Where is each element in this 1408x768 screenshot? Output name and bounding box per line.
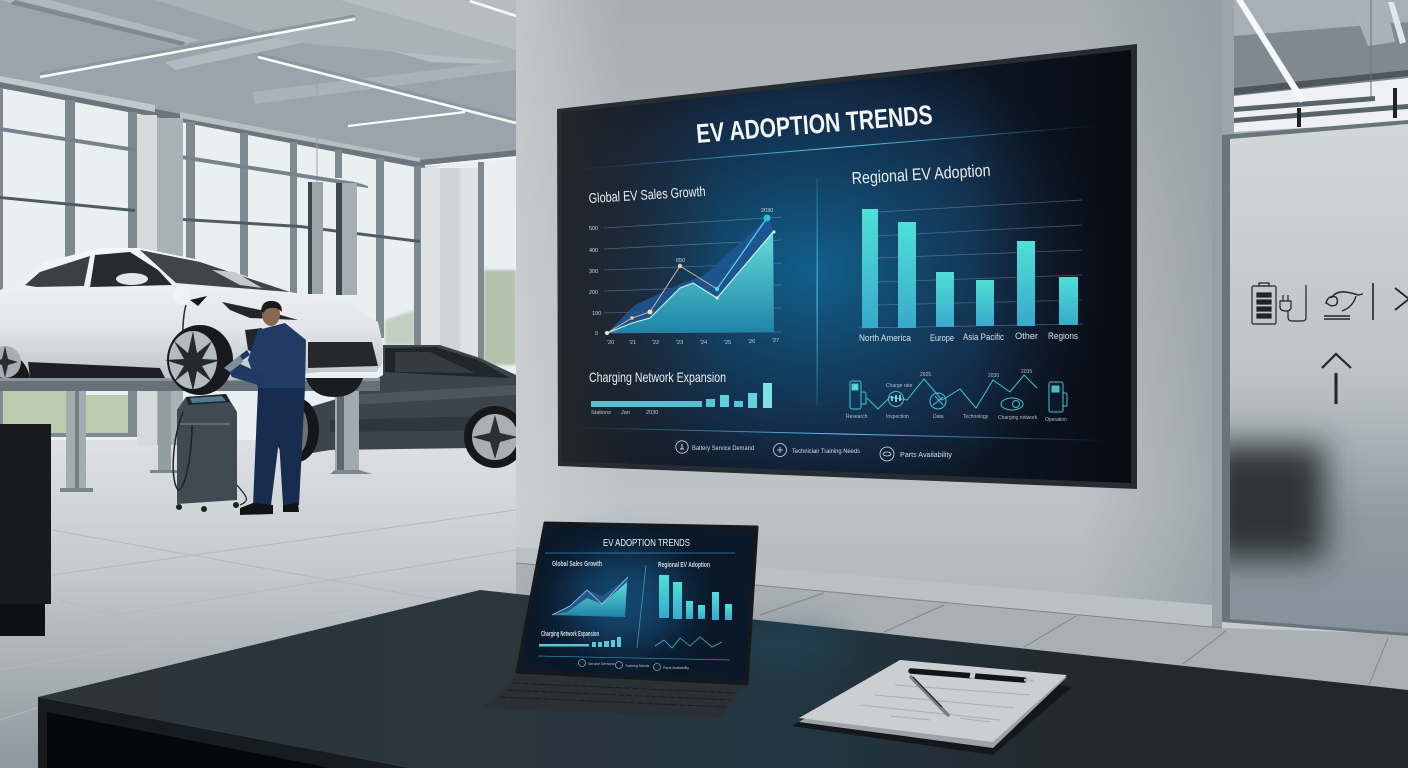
tablet title: EV ADOPTION TRENDS xyxy=(603,538,690,549)
tablet footer: Service Demand xyxy=(588,662,615,666)
tablet charging bars xyxy=(539,637,621,647)
technician torso xyxy=(248,323,306,388)
footer: battery service demand: Battery Service Demand xyxy=(692,445,754,452)
icon: battery xyxy=(1252,283,1276,324)
door icons xyxy=(1252,283,1408,404)
clipboard with pen xyxy=(792,660,1072,755)
footer: parts availability xyxy=(880,447,952,461)
icon: charger right xyxy=(1049,382,1067,412)
icon row labels: Data xyxy=(933,414,944,420)
icon: charger left xyxy=(850,381,866,409)
icon row labels: Inspection xyxy=(886,414,909,420)
icon row labels xyxy=(846,369,1067,423)
footer: technician training needs: Technician Training Needs xyxy=(792,448,861,455)
icon row labels: 2030 xyxy=(988,373,999,379)
dark car xyxy=(275,345,526,468)
title divider xyxy=(576,125,1100,170)
reception counter xyxy=(0,424,51,636)
icon row labels: 2025 xyxy=(920,372,931,378)
region labels xyxy=(859,331,1078,343)
line chart: '24 xyxy=(700,340,707,346)
line chart: '26 xyxy=(748,339,755,345)
icon row labels: Charging network xyxy=(998,415,1038,421)
dark car rear wheel xyxy=(464,406,526,468)
icon: battery circle xyxy=(888,392,904,406)
pen xyxy=(911,671,1034,715)
line chart: 400 xyxy=(589,248,598,254)
icon: wrench circle xyxy=(930,393,946,409)
panel: global EV sales growth xyxy=(588,183,782,346)
panel: regional EV adoption xyxy=(851,161,1083,343)
tablet footer xyxy=(578,660,689,670)
back wall xyxy=(516,0,1222,628)
charge plug xyxy=(174,285,207,385)
technician xyxy=(224,301,306,515)
footer items xyxy=(676,441,952,461)
tablet screen xyxy=(520,526,754,680)
region labels: Asia Pacific xyxy=(963,332,1004,342)
tablet headings: Regional EV Adoption xyxy=(658,562,710,569)
heading: charging network expansion: Charging Network Expansion xyxy=(589,369,726,385)
floor tile seams xyxy=(0,510,516,720)
floor right of wall xyxy=(516,563,1408,700)
tablet headings: Global Sales Growth xyxy=(552,561,602,568)
icon: up arrow xyxy=(1322,354,1351,404)
tablet divider xyxy=(637,565,646,648)
desk sheen xyxy=(730,627,850,663)
vertical divider xyxy=(816,178,818,406)
line chart: 500 xyxy=(589,226,598,232)
vehicle lift xyxy=(0,378,380,492)
tablet bars xyxy=(659,575,732,620)
charging bar labels xyxy=(591,410,658,416)
icon: chevron xyxy=(1395,288,1408,310)
line chart: 0 xyxy=(595,331,598,337)
technician legs xyxy=(253,388,305,505)
footer divider xyxy=(573,427,1110,441)
tablet area chart xyxy=(552,577,628,617)
back series area xyxy=(607,218,774,333)
car far wheel xyxy=(306,378,363,397)
divider stroke xyxy=(1372,283,1374,320)
blurred figure behind glass xyxy=(1205,445,1325,560)
front series line xyxy=(607,232,773,333)
heading: regional EV adoption: Regional EV Adoption xyxy=(851,161,991,188)
wall shading xyxy=(516,0,1222,628)
desk front recess xyxy=(47,712,330,768)
wall corner xyxy=(1212,0,1222,628)
floor tile seams right xyxy=(516,563,1388,685)
desk top surface xyxy=(38,590,1408,768)
region labels: North America xyxy=(859,333,911,343)
line chart: '27 xyxy=(772,338,779,344)
heading: global EV sales growth: Global EV Sales Growth xyxy=(588,183,706,206)
windows and columns xyxy=(0,88,484,448)
charging bars xyxy=(591,383,772,408)
right room behind glass xyxy=(1222,0,1408,135)
line chart: '20 xyxy=(607,340,614,346)
technician head xyxy=(261,301,282,326)
charging bar labels: Stations xyxy=(591,410,611,416)
icon row labels: Technology xyxy=(963,414,989,420)
line chart: '21 xyxy=(629,340,636,346)
line chart: '25 xyxy=(724,340,731,346)
icon: technician at bench xyxy=(1324,292,1363,319)
line chart: 100 xyxy=(592,311,601,317)
keyboard xyxy=(483,672,748,718)
wall baseboard xyxy=(516,547,1222,628)
region labels: Regions xyxy=(1048,331,1078,341)
bar chart xyxy=(859,200,1083,328)
icon row labels: Operation xyxy=(1045,417,1067,423)
line chart xyxy=(589,208,782,346)
tablet icon row xyxy=(655,637,722,648)
tablet body xyxy=(517,523,757,684)
line chart: 200 xyxy=(589,290,598,296)
tablet footer: Training Needs xyxy=(625,664,649,668)
dark car front wheel xyxy=(275,398,319,462)
footer: battery service demand xyxy=(676,441,754,453)
desk front face xyxy=(38,697,410,768)
frosted glass door xyxy=(1205,120,1408,636)
display bezel xyxy=(557,44,1137,489)
cyan series line xyxy=(717,218,767,289)
line chart: '22 xyxy=(652,340,659,346)
front series area xyxy=(607,232,774,333)
footer: parts availability: Parts Availability xyxy=(900,450,952,459)
display screen xyxy=(561,50,1131,483)
tablet headings: Charging Network Expansion xyxy=(541,631,599,638)
document lines xyxy=(860,685,1030,722)
icon: plug xyxy=(1280,285,1306,321)
white electric car xyxy=(0,248,383,397)
line chart: '23 xyxy=(676,340,683,346)
charging cart xyxy=(173,394,246,512)
region labels: Other xyxy=(1015,331,1038,341)
ceiling beams and light strips xyxy=(0,0,516,182)
orange series line xyxy=(607,266,717,333)
rear wheel xyxy=(0,346,30,378)
line chart: 2030 xyxy=(761,208,773,214)
wall display xyxy=(557,44,1137,489)
footer: technician training needs xyxy=(774,444,861,456)
line chart: 650 xyxy=(676,258,685,264)
charging infrastructure icon row xyxy=(846,369,1067,423)
data points xyxy=(605,214,776,335)
connecting line xyxy=(867,375,1037,409)
panel: charging network expansion xyxy=(589,369,772,416)
tablet with keyboard xyxy=(483,523,757,718)
desk xyxy=(38,590,1408,768)
tablet headings xyxy=(541,561,710,638)
icon row labels: Charge rate xyxy=(886,383,913,389)
front wheel xyxy=(165,325,233,395)
charging bar labels: 2030 xyxy=(646,410,658,416)
tablet footer: Parts Availability xyxy=(663,666,689,670)
icon: car xyxy=(1001,398,1023,410)
charging bar labels: Jan xyxy=(621,410,630,416)
line chart: 300 xyxy=(589,269,598,275)
region labels: Europe xyxy=(930,333,954,343)
icon row labels: 2035 xyxy=(1021,369,1032,375)
icon row labels: Research xyxy=(846,414,868,420)
display title: EV ADOPTION TRENDS xyxy=(695,100,934,149)
